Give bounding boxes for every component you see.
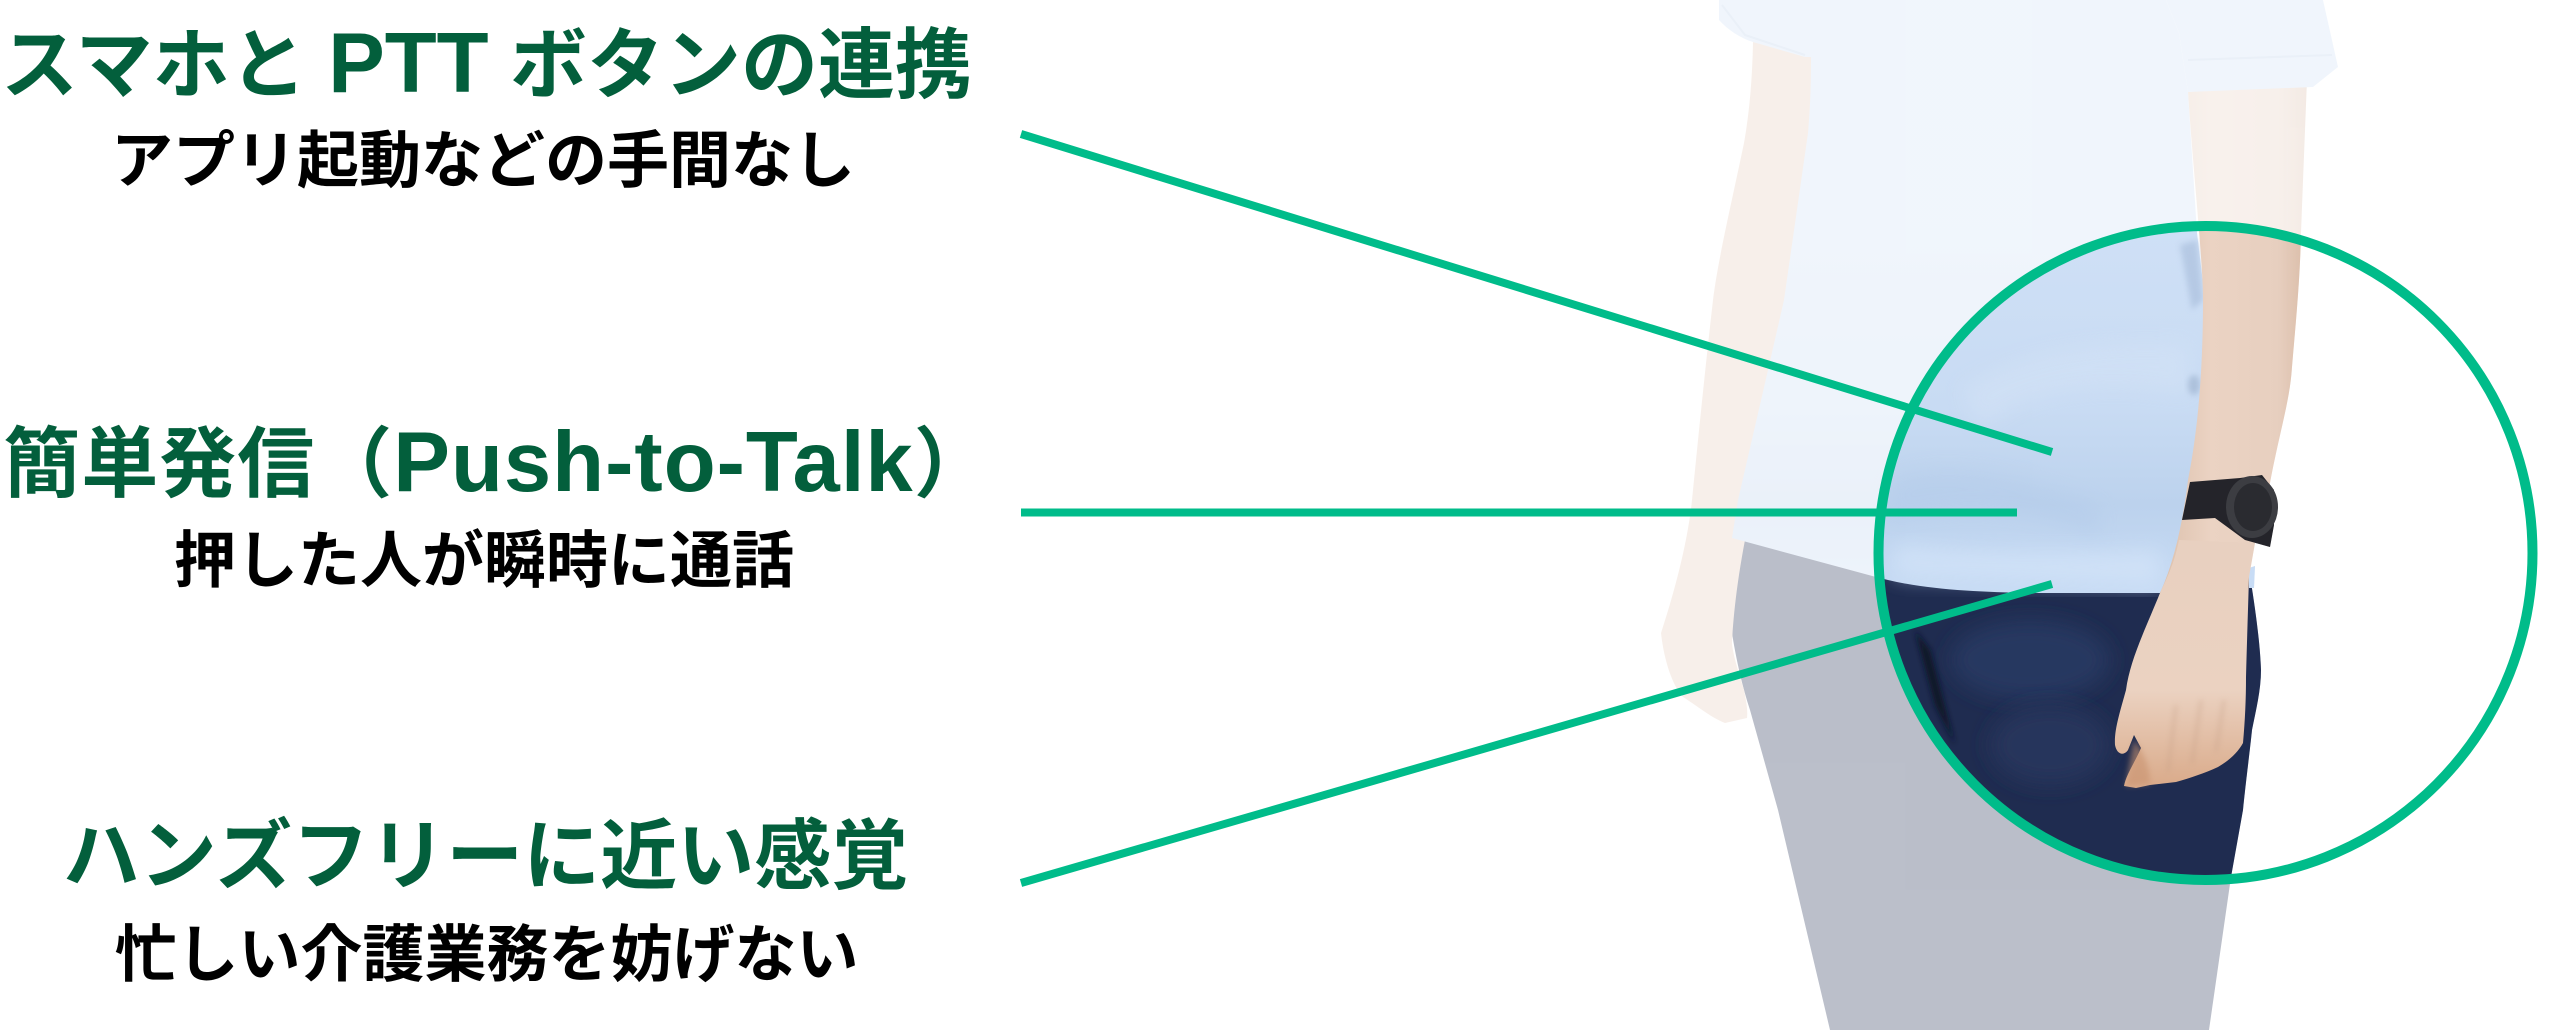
callout line: smartphone link bbox=[1021, 134, 2052, 452]
person: faded body outside the circle bbox=[1661, 0, 2338, 1030]
person: full-colour area inside the circle bbox=[1884, 231, 2301, 875]
figure with callout lines bbox=[1020, 0, 2538, 1030]
callout line: push to talk bbox=[1021, 508, 2017, 516]
subtext: no disruption: 忙しい介護業務を妨げない bbox=[114, 921, 858, 990]
heading: hands-free: ハンズフリーに近い感覚 bbox=[63, 814, 908, 900]
subtext: no app launching: アプリ起動などの手間なし bbox=[111, 127, 855, 196]
subtext: instant talk: 押した人が瞬時に通話 bbox=[174, 527, 794, 596]
highlight circle around the wrist device bbox=[1878, 226, 2532, 880]
heading: push-to-talk: 簡単発信（Push-to-Talk） bbox=[3, 415, 992, 510]
heading: smartphone and PTT: スマホと PTT ボタンの連携 bbox=[1, 16, 972, 111]
callout line: hands-free bbox=[1021, 584, 2052, 883]
